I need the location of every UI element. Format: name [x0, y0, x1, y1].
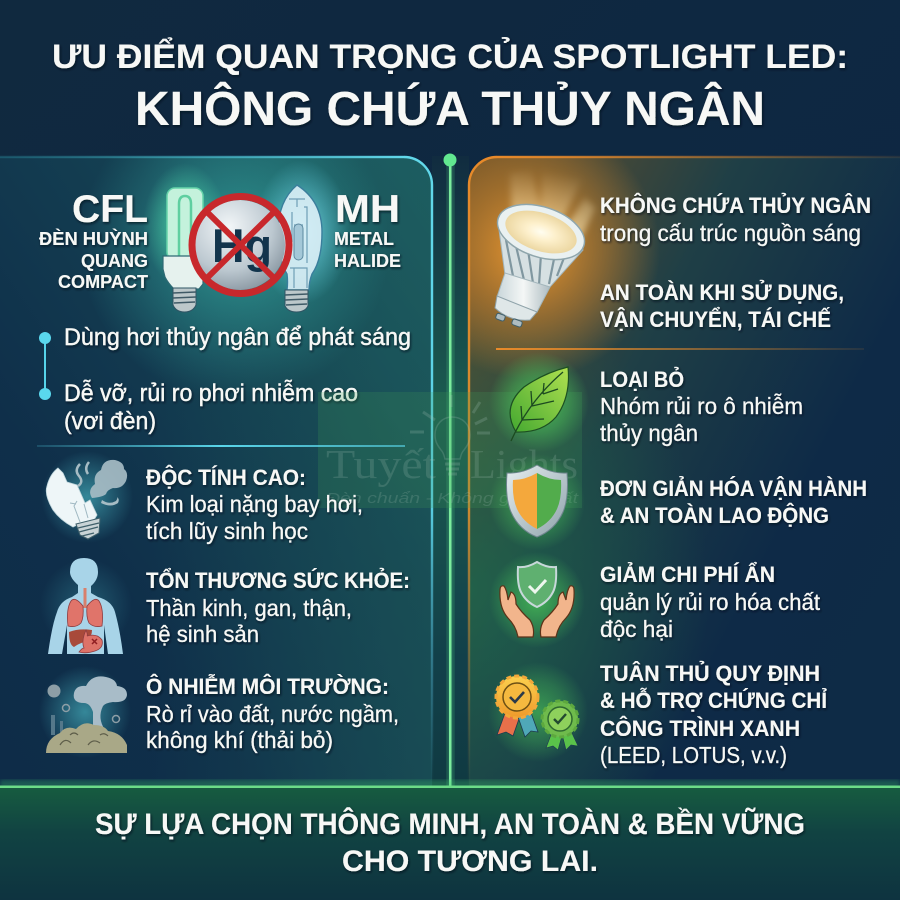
text: eliminate: thủy ngân — [600, 420, 698, 446]
bullet connector — [39, 332, 51, 400]
text: simplified operation: & AN TOÀN LAO ĐỘNG — [600, 503, 829, 528]
text: mercury lamp bullets: Dễ vỡ, rủi ro phơi nhiễm cao — [64, 380, 358, 407]
text: eliminate: LOẠI BỎ — [600, 367, 684, 392]
icon: human body organs — [40, 558, 132, 654]
icon: mercury prohibited: Hg — [212, 219, 272, 272]
text: eliminate: Nhóm rủi ro ô nhiễm — [600, 393, 803, 419]
text: health damage: TỔN THƯƠNG SỨC KHỎE: — [146, 568, 410, 593]
divider: left panel — [37, 445, 405, 447]
text: hidden cost — [600, 562, 821, 642]
footer text: CHO TƯƠNG LAI. — [342, 845, 598, 878]
title — [52, 38, 848, 136]
text: compliance: CÔNG TRÌNH XANH — [600, 716, 800, 741]
green glow behind centre divider — [432, 156, 469, 788]
CFL label: CFL — [72, 188, 148, 231]
text: simplified operation: ĐƠN GIẢN HÓA VẬN HÀNH — [600, 476, 867, 501]
text: mercury free — [600, 193, 871, 246]
panel: spotlight LED (right) — [469, 156, 900, 788]
text: compliance: & HỖ TRỢ CHỨNG CHỈ — [600, 687, 827, 713]
MH label: HALIDE — [334, 251, 401, 271]
text: safe use: AN TOÀN KHI SỬ DỤNG, — [600, 280, 844, 305]
divider: right panel — [496, 348, 864, 350]
text: eliminate — [600, 367, 803, 446]
MH label: MH — [335, 188, 400, 231]
icon: certification medals — [488, 662, 588, 762]
text: environmental pollution: Ô NHIỄM MÔI TRƯỜNG: — [146, 673, 389, 699]
icon: LED spotlight — [490, 167, 595, 328]
icon: leaf — [489, 352, 589, 452]
CFL label: QUANG — [81, 251, 148, 271]
icon: broken bulb with fumes — [41, 451, 133, 543]
text: environmental pollution: Rò rỉ vào đất, nước ngầm, — [146, 701, 399, 727]
text: safe use — [600, 280, 844, 332]
text: toxicity — [146, 465, 363, 544]
text: toxicity: ĐỘC TÍNH CAO: — [146, 465, 306, 490]
text: environmental pollution — [146, 673, 399, 753]
text: toxicity: Kim loại nặng bay hơi, — [146, 491, 363, 517]
icon: mercury prohibited — [192, 196, 289, 294]
footer band — [0, 780, 900, 900]
text: compliance: (LEED, LOTUS, v.v.) — [600, 742, 787, 768]
watermark — [318, 392, 582, 508]
icon: CFL bulb — [143, 163, 227, 312]
text: mercury free: trong cấu trúc nguồn sáng — [600, 220, 861, 246]
text: health damage — [146, 568, 410, 647]
CFL label: COMPACT — [58, 272, 148, 292]
text: mercury lamp bullets: Dùng hơi thủy ngân để phát sáng — [64, 324, 411, 351]
CFL label: ĐÈN HUỲNH — [39, 228, 148, 249]
text: mercury lamp bullets — [64, 324, 411, 435]
icon: hands with shield — [489, 552, 585, 648]
text: simplified operation — [600, 476, 867, 528]
watermark: Lights — [470, 441, 578, 487]
text: compliance: TUÂN THỦ QUY ĐỊNH — [600, 661, 820, 686]
icon: half orange half green shield — [489, 454, 585, 550]
icon: metal halide bulb — [254, 160, 350, 312]
footer text — [95, 807, 805, 878]
text: toxicity: tích lũy sinh học — [146, 518, 308, 544]
icon: pollution cloud — [39, 666, 131, 758]
panel: mercury lamps (left) — [0, 156, 432, 788]
title: KHÔNG CHỨA THỦY NGÂN — [135, 81, 765, 136]
title: ƯU ĐIỂM QUAN TRỌNG CỦA SPOTLIGHT LED: — [52, 38, 848, 76]
centre divider line with dot — [444, 154, 456, 788]
MH label — [334, 188, 401, 271]
MH label: METAL — [334, 229, 394, 249]
text: safe use: VẬN CHUYỂN, TÁI CHẾ — [600, 307, 831, 332]
text: health damage: Thần kinh, gan, thận, — [146, 595, 352, 621]
text: environmental pollution: không khí (thải bỏ) — [146, 727, 333, 753]
text: mercury free: KHÔNG CHỨA THỦY NGÂN — [600, 193, 871, 218]
watermark: Đèn chuẩn - Không gian chất — [326, 490, 579, 507]
text: health damage: hệ sinh sản — [146, 621, 259, 647]
text: hidden cost: độc hại — [600, 616, 673, 642]
watermark: Tuyết — [326, 441, 437, 487]
text: mercury lamp bullets: (vơi đèn) — [64, 408, 156, 435]
text: hidden cost: quản lý rủi ro hóa chất — [600, 589, 821, 615]
text: hidden cost: GIẢM CHI PHÍ ẨN — [600, 562, 775, 587]
footer text: SỰ LỰA CHỌN THÔNG MINH, AN TOÀN & BỀN VỮNG — [95, 807, 805, 841]
CFL label — [39, 188, 148, 292]
text: compliance — [600, 661, 827, 768]
